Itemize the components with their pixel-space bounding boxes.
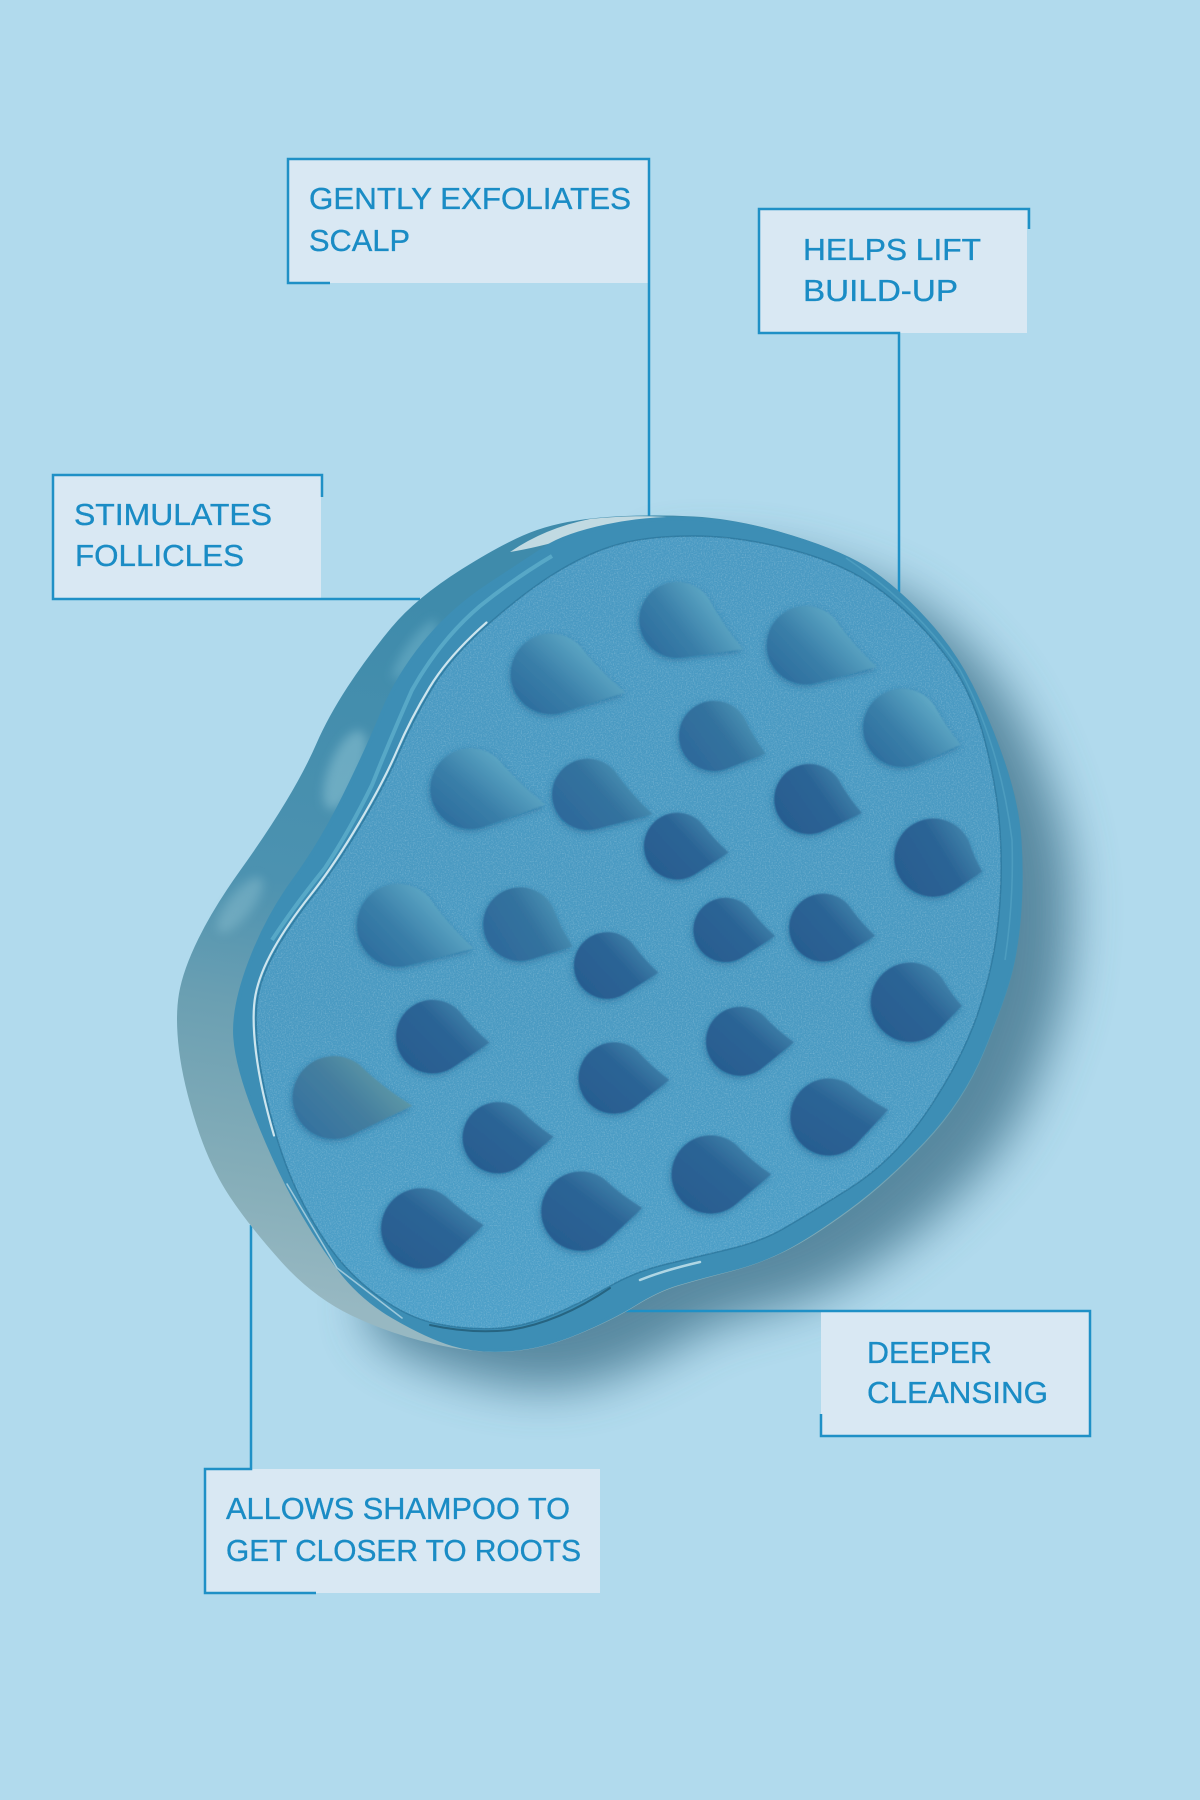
callout: allows shampoo to get closer to roots xyxy=(205,1225,600,1593)
brush side wall xyxy=(177,515,1023,1352)
nub 16 xyxy=(868,960,964,1045)
callout: stimulates follicles xyxy=(53,475,420,599)
nub 23 xyxy=(672,1135,771,1213)
label text: helps lift build-up: BUILD-UP xyxy=(803,273,958,308)
label text: allows shampoo: ALLOWS SHAMPOO TO xyxy=(226,1491,570,1526)
callout: helps lift build-up xyxy=(759,209,1029,592)
nub 10 xyxy=(885,809,993,909)
label text: gently exfoliates scalp xyxy=(309,181,631,258)
label text: stimulates follicles: FOLLICLES xyxy=(75,538,244,573)
label text: deeper cleansing: DEEPER xyxy=(867,1335,992,1370)
nub 19 xyxy=(577,1041,671,1115)
nub 21 xyxy=(786,1072,893,1160)
label text: allows shampoo xyxy=(226,1491,581,1568)
nub 13 xyxy=(690,894,779,968)
label text: stimulates follicles xyxy=(74,497,272,573)
nub 9 xyxy=(640,809,733,885)
label text: gently exfoliates scalp: SCALP xyxy=(309,223,410,258)
nub 6 xyxy=(423,741,554,844)
callout: gently exfoliates scalp xyxy=(288,159,649,520)
brush drop shadow xyxy=(367,551,1071,1388)
label text: helps lift build-up xyxy=(803,232,981,308)
nub 4 xyxy=(670,691,777,787)
nub 7 xyxy=(543,750,663,848)
foam speckle texture xyxy=(240,520,1020,1350)
nub 22 xyxy=(462,1101,554,1174)
nub 5 xyxy=(854,680,971,782)
nub 25 xyxy=(379,1185,486,1271)
label text: gently exfoliates scalp: GENTLY EXFOLIATES xyxy=(309,181,631,216)
nub 18 xyxy=(705,1006,794,1077)
nub 15 xyxy=(570,928,663,1006)
callout: deeper cleansing xyxy=(612,1311,1090,1436)
nub 2 xyxy=(502,625,635,731)
label text: deeper cleansing: CLEANSING xyxy=(867,1375,1048,1410)
label text: stimulates follicles: STIMULATES xyxy=(74,497,272,532)
nub 12 xyxy=(472,876,587,980)
nub 8 xyxy=(766,756,871,847)
nub 11 xyxy=(347,874,486,988)
nub 14 xyxy=(784,889,880,969)
nub 24 xyxy=(539,1168,644,1253)
label text: allows shampoo: GET CLOSER TO ROOTS xyxy=(226,1533,581,1568)
massage nubs xyxy=(289,570,993,1271)
rim lighter bands xyxy=(272,556,1012,960)
nub 3 xyxy=(757,596,888,704)
nub 1 xyxy=(627,570,758,684)
brush rim xyxy=(235,519,1021,1350)
white gloss line on rim xyxy=(254,622,700,1331)
nub 17 xyxy=(392,996,493,1079)
foam brush face xyxy=(256,536,1001,1329)
scalp brush xyxy=(177,515,1023,1352)
label text: deeper cleansing xyxy=(867,1335,1048,1410)
nub 20 xyxy=(289,1052,416,1147)
glossy reflections on side wall xyxy=(210,516,680,939)
label text: helps lift build-up: HELPS LIFT xyxy=(803,232,981,267)
